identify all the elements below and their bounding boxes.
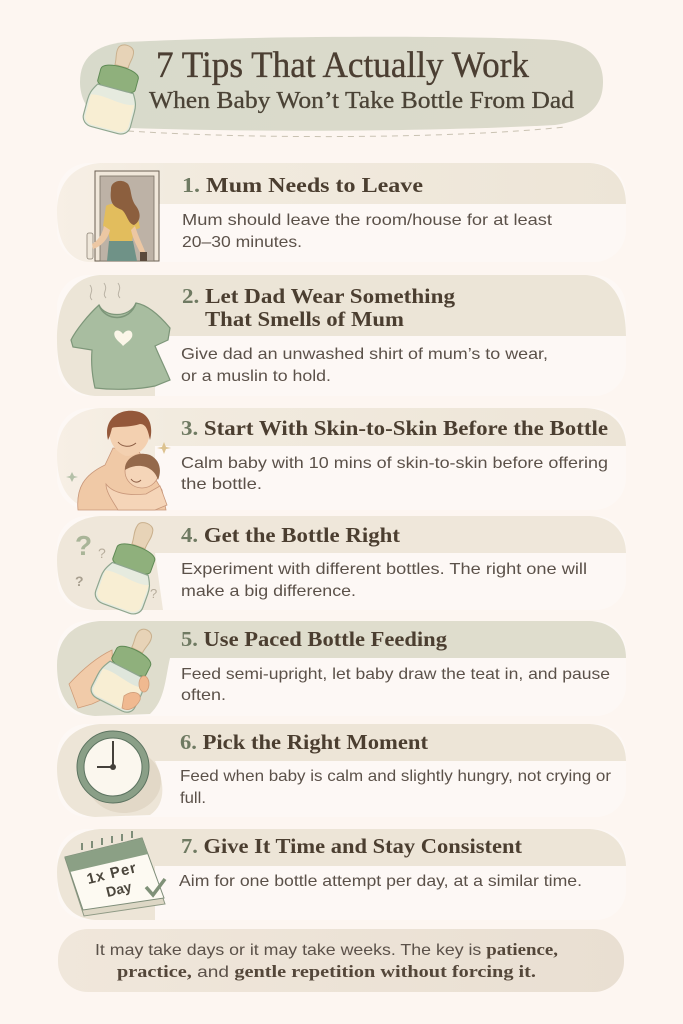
body text: Experiment with different bottles. The right one will [181,561,587,578]
icon: calendar one per day: Day [104,878,133,900]
body text [180,768,612,807]
heading: 2. Let Dad Wear Something [182,284,456,308]
icon: bottle with question marks: ? [75,573,84,589]
subtitle text: When Baby Won’t Take Bottle From Dad [149,88,574,114]
body text [181,455,608,493]
panel: tip 4 [57,515,626,617]
heading: 1. Mum Needs to Leave [182,173,423,197]
body text: Feed semi-upright, let baby draw the teat in, and pause [181,666,610,683]
title text: 7 Tips That Actually Work [156,45,529,86]
icon: dad holding baby skin-to-skin [66,411,171,510]
icon: bottle with question marks: ? [98,545,106,561]
body text: often. [181,687,226,704]
heading: That Smells of Mum [205,307,405,331]
body text: or a muslin to hold. [181,368,331,385]
body text [181,561,587,600]
icon: bottle with question marks [75,515,170,617]
callout: closing message: practice, and gentle repetition without forcing it. [117,962,536,981]
panel: tip 1 [57,163,626,262]
icon: bottle with question marks: ? [150,586,157,601]
body text [181,666,610,704]
body text: full. [180,790,206,807]
panel: tip 5 [57,619,626,716]
heading: 5. Use Paced Bottle Feeding [181,627,448,651]
icon: bottle with question marks: ? [75,530,92,561]
body text: Mum should leave the room/house for at least [182,212,553,229]
heading: 7. Give It Time and Stay Consistent [181,834,522,858]
heading [182,284,456,331]
body text [182,212,553,251]
body text: make a big difference. [181,583,356,600]
body text: Give dad an unwashed shirt of mum’s to wear, [181,346,548,363]
panel: tip 7 [57,829,626,920]
icon: baby bottle [81,39,151,136]
panel: tip 6 [57,724,626,817]
icon: hand holding tilted bottle [69,619,169,715]
icon: wall clock [77,731,161,813]
body text: 20–30 minutes. [182,234,302,251]
icon: mum leaving through door [87,171,159,261]
callout: closing message [58,929,624,992]
icon: calendar one per day [65,831,165,916]
body text: Aim for one bottle attempt per day, at a similar time. [179,873,582,890]
icon: green t-shirt with heart [71,283,170,389]
panel: tip 2 [57,275,626,396]
body text [181,346,548,385]
title banner [80,37,603,137]
body text: Calm baby with 10 mins of skin-to-skin before offering [181,455,608,472]
callout: closing message: It may take days or it may take weeks. The key is patience, [95,940,558,959]
body text: the bottle. [181,476,262,493]
body text: Feed when baby is calm and slightly hungry, not crying or [180,768,612,785]
heading: 6. Pick the Right Moment [180,730,428,754]
heading: 3. Start With Skin-to-Skin Before the Bottle [181,416,608,440]
panel: tip 3 [57,408,626,510]
icon: calendar one per day: 1x Per [85,859,139,888]
heading: 4. Get the Bottle Right [181,523,400,547]
